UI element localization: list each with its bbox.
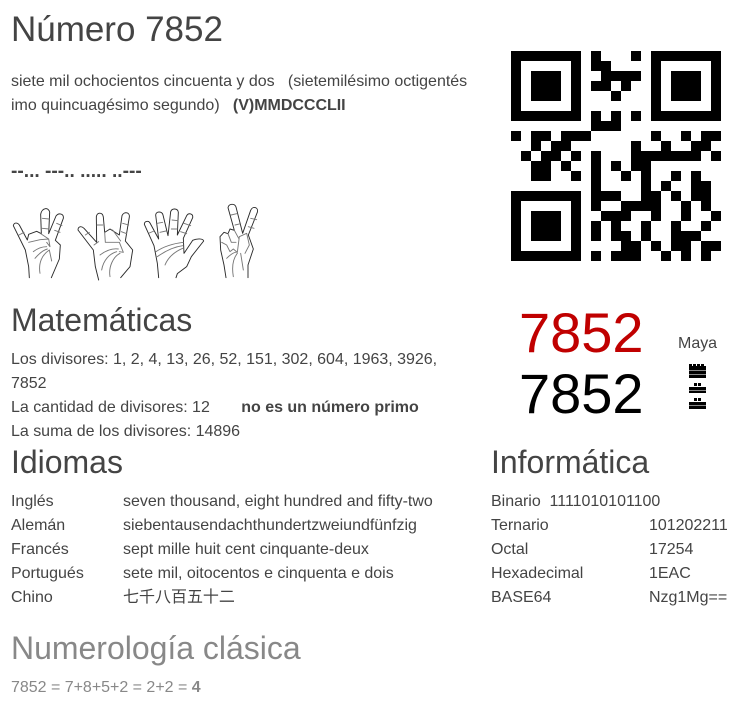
heading: Matemáticas: Matemáticas	[11, 302, 192, 338]
base: Octal: Octal	[491, 541, 528, 558]
text block: divisors: La cantidad de divisores: 12 no es un número primo	[11, 399, 419, 416]
language: Inglés: Inglés	[11, 493, 54, 510]
title: Número 7852	[11, 10, 223, 49]
language: Chino	[11, 588, 235, 606]
icon: hand 3	[144, 209, 204, 278]
QR finder patterns	[511, 51, 721, 261]
text block: number in words and roman numeral: imo quincuagésimo segundo) (V)MMDCCCLII	[11, 97, 346, 114]
QR code	[511, 51, 721, 261]
language: Francés	[11, 541, 369, 558]
icon: hand 4	[220, 204, 258, 278]
icon: sign language hands	[12, 204, 258, 280]
language: Alemán: siebentausendachthundertzweiundfünfzig	[123, 517, 417, 534]
language: Francés: sept mille huit cent cinquante-deux	[123, 541, 369, 558]
label: Maya: Maya	[678, 335, 717, 352]
number in black: 7852	[519, 362, 644, 425]
base: BASE64: BASE64	[491, 589, 551, 606]
base: Ternario: 101202211	[649, 517, 728, 534]
language: Alemán: Alemán	[11, 517, 65, 534]
base: Hexadecimal	[491, 565, 691, 582]
icon: hand 2	[78, 213, 133, 280]
base: Ternario: Ternario	[491, 517, 549, 534]
language: Inglés: seven thousand, eight hundred and fifty-two	[123, 493, 433, 510]
language: Chino: 七千八百五十二	[123, 589, 235, 606]
heading: Informática: Informática	[491, 444, 649, 480]
icon: hand 1	[13, 209, 63, 278]
base: Octal: 17254	[649, 541, 693, 558]
base: Octal	[491, 541, 693, 558]
base: BASE64: Nzg1Mg==	[649, 589, 727, 606]
base: Binario: Binario 1111010101100	[491, 493, 660, 510]
text block: divisors	[11, 351, 437, 440]
text block: numerology sum: 7852 = 7+8+5+2 = 2+2 = 4	[11, 679, 201, 696]
language: Portugués: sete mil, oitocentos e cinquenta e dois	[123, 565, 394, 582]
language: Francés: Francés	[11, 541, 69, 558]
base: Hexadecimal: Hexadecimal	[491, 565, 583, 582]
text block: number in words and roman numeral	[11, 73, 467, 114]
language: Portugués: Portugués	[11, 565, 84, 582]
base: Hexadecimal: 1EAC	[649, 565, 691, 582]
text block: divisors: La suma de los divisores: 14896	[11, 423, 240, 440]
base: BASE64	[491, 589, 727, 606]
text block: number in words and roman numeral: siete mil ochocientos cincuenta y dos (sietemilésimo octigentés	[11, 73, 467, 90]
panel: number bases	[491, 493, 728, 606]
heading: Numerología clásica: Numerología clásica	[11, 630, 301, 666]
text block: divisors: Los divisores: 1, 2, 4, 13, 26, 52, 151, 302, 604, 1963, 3926,	[11, 351, 437, 368]
heading: Idiomas: Idiomas	[11, 444, 123, 480]
panel: languages	[11, 493, 433, 606]
language: Chino: Chino	[11, 589, 53, 606]
icon: Maya numerals	[689, 364, 706, 409]
number in red: 7852	[519, 301, 644, 364]
base: Ternario	[491, 517, 728, 534]
text block: divisors: 7852	[11, 375, 47, 392]
QR data modules	[511, 51, 721, 261]
morse code: --... ---.. ..... ..---	[11, 161, 142, 182]
